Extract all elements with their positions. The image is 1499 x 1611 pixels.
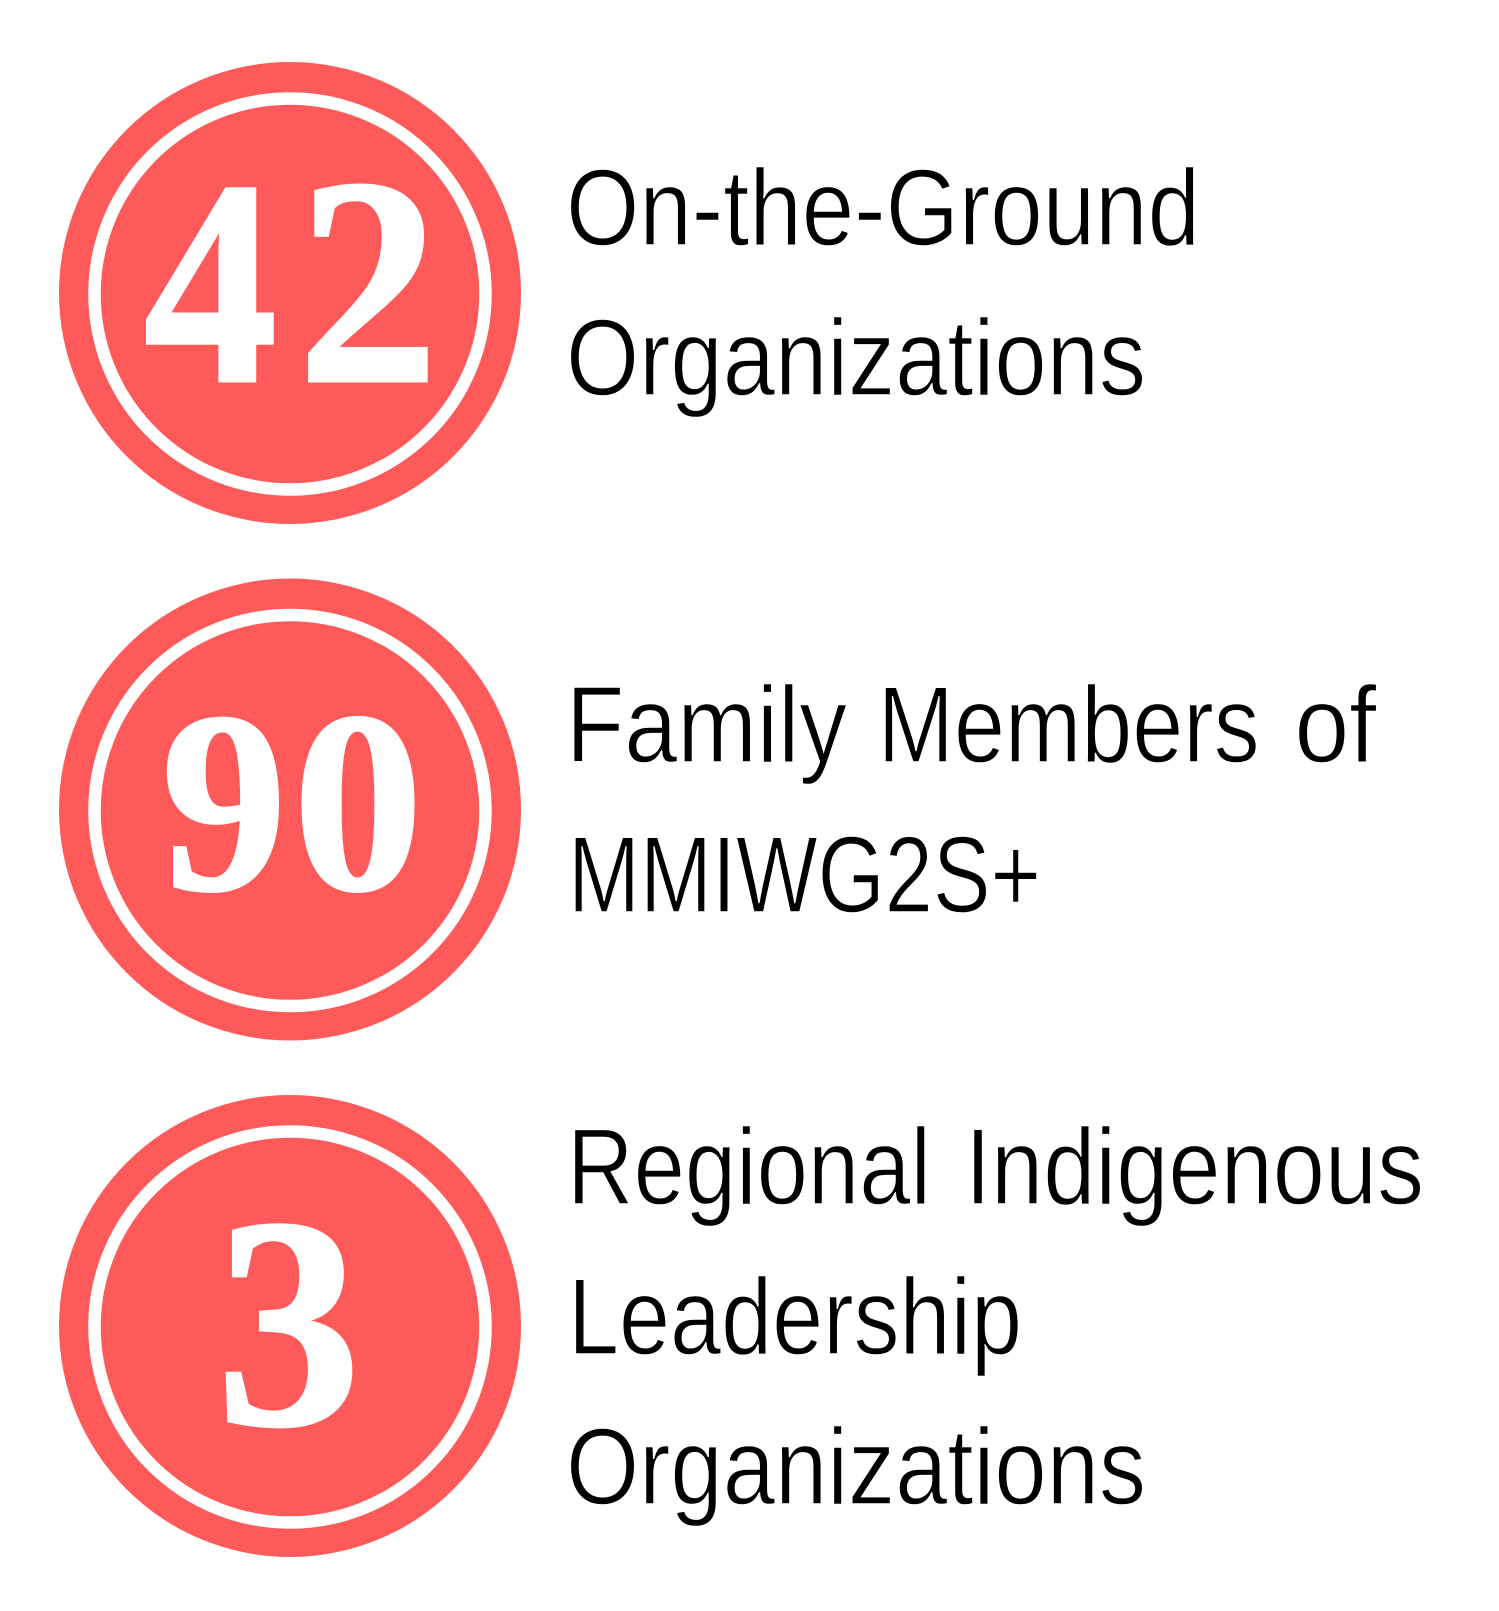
number: 3: 3	[216, 1156, 361, 1489]
number: 42: 2	[298, 119, 438, 446]
label: Family Members of MMIWG2S+	[566, 664, 1377, 936]
badge: 3	[59, 1095, 521, 1557]
label: On-the-Ground Organizations	[566, 147, 1200, 419]
badge: 42	[59, 62, 521, 524]
label: Regional Indigenous Leadership Organizations: Leadership	[568, 1256, 1022, 1378]
number: 42: 4	[144, 121, 277, 445]
label: Regional Indigenous Leadership Organizations: Organizations	[566, 1406, 1146, 1528]
label: Regional Indigenous Leadership Organizations	[566, 1106, 1424, 1528]
number: 90	[161, 659, 423, 945]
badge: 90	[59, 578, 521, 1040]
number: 42	[144, 119, 438, 446]
label: Family Members of MMIWG2S+: Family	[566, 664, 847, 786]
label: On-the-Ground Organizations: On-the-Ground	[566, 147, 1200, 269]
label: Family Members of MMIWG2S+: Members	[878, 664, 1260, 786]
label: Family Members of MMIWG2S+: of	[1294, 664, 1377, 786]
label: On-the-Ground Organizations: Organizations	[566, 297, 1146, 419]
label: Regional Indigenous Leadership Organizations: Regional	[567, 1106, 931, 1228]
label: Regional Indigenous Leadership Organizations: Indigenous	[965, 1106, 1424, 1228]
number: 90: 0	[293, 659, 423, 945]
label: Family Members of MMIWG2S+: MMIWG2S+	[568, 814, 1041, 936]
number: 90: 9	[161, 660, 287, 945]
